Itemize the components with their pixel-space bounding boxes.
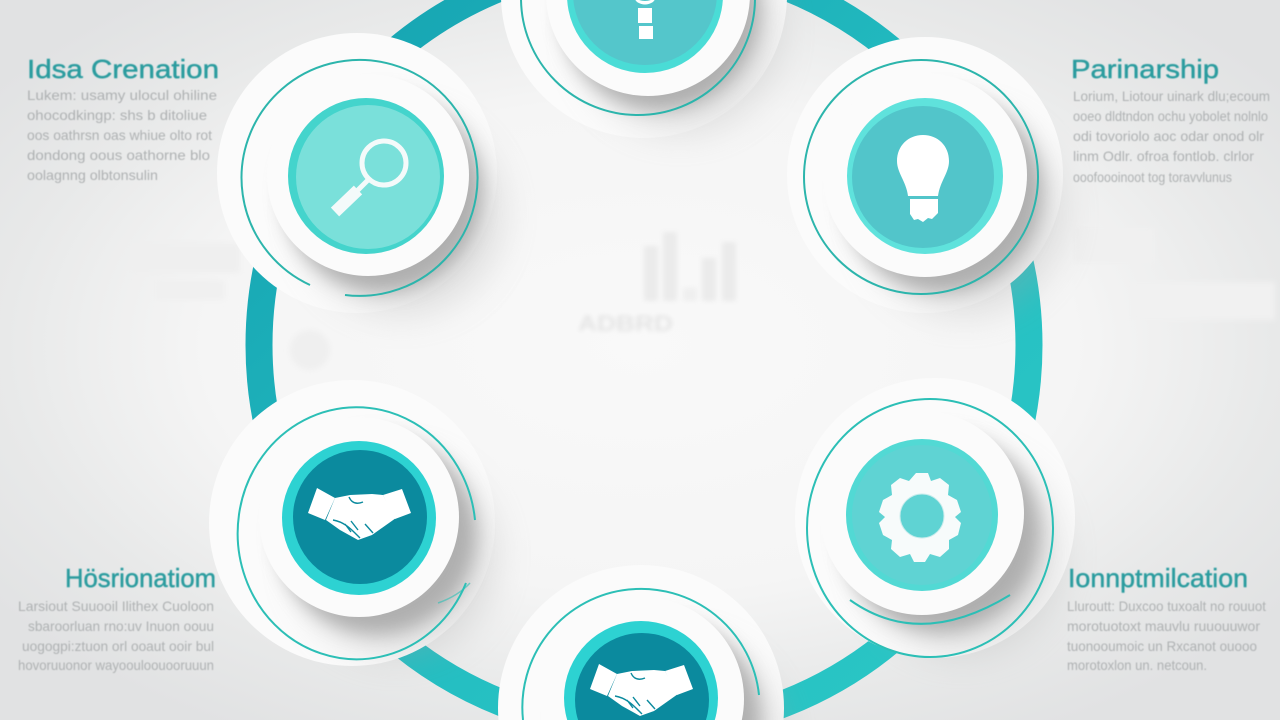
text block: partnership: Lorium, Liotour uinark dlu;ecoum: [1073, 88, 1270, 104]
node: lower left: [209, 380, 496, 666]
text block: idea creation: Lukem: usamy ulocul ohiline: [27, 87, 217, 103]
text block: idea creation: [27, 54, 219, 183]
text block: lower right: tuonooumoic un Rxcanot ouooo: [1067, 638, 1257, 654]
text block: lower left: hovoruuonor wayoouloouooruuun: [18, 657, 214, 673]
node: top: [501, 0, 787, 138]
main circular ring: [259, 0, 1029, 720]
text block: lower left: Larsiout Suuooil Ilithex Cuoloon: [18, 598, 214, 614]
text block: lower left: uogogpi:ztuon orl ooaut ooir bul: [22, 638, 214, 654]
text block: lower left: [18, 563, 216, 673]
text block: idea creation: oos oathrsn oas whiue olto rot: [27, 127, 212, 143]
icon: key stem: [632, 0, 658, 39]
text block: lower left: sbaroorluan rno:uv Inuon oouu: [28, 618, 214, 634]
icon: gear: [879, 473, 961, 562]
text block: partnership: ooofoooinoot tog toravvlunus: [1073, 169, 1232, 185]
text block: lower right: morotuotoxt mauvlu ruuouuwor: [1067, 618, 1260, 634]
text block: idea creation: ohocodkingp: shs b ditoliue: [27, 107, 207, 123]
text block: partnership: [1071, 54, 1270, 185]
text block: lower right: morotoxlon un. netcoun.: [1067, 657, 1207, 673]
faded background chart: ADBRD: [578, 311, 673, 336]
text block: partnership: odi tovoriolo aoc odar onod olr: [1073, 128, 1264, 144]
faded background chart: [578, 232, 736, 336]
icon: light bulb: [897, 135, 949, 222]
node: idea creation: [217, 33, 502, 314]
node: partnership: [787, 37, 1064, 314]
faded background cards: [130, 228, 1275, 370]
text block: idea creation: dondong oous oathorne blo: [27, 147, 210, 163]
text block: lower right: [1067, 563, 1266, 673]
text block: idea creation: Idsa Crenation: [27, 54, 219, 84]
icon: magnifier: [335, 141, 406, 212]
text block: partnership: Parinarship: [1071, 54, 1219, 84]
text block: lower left: Hösrionatiom: [65, 563, 216, 593]
text block: lower right: Lluroutt: Duxcoo tuxoalt no rouuot: [1067, 598, 1266, 614]
text block: lower right: Ionnptmilcation: [1068, 563, 1248, 593]
text block: partnership: linm Odlr. ofroa fontlob. clrlor: [1073, 148, 1254, 164]
icon: handshake: [308, 488, 411, 540]
icon: handshake bottom: [590, 664, 693, 716]
text block: idea creation: oolagnng olbtonsulin: [27, 167, 158, 183]
node: bottom: [498, 565, 784, 720]
node: lower right: [795, 378, 1075, 658]
text block: partnership: ooeo dldtndon ochu yobolet nolnlo: [1073, 108, 1268, 124]
